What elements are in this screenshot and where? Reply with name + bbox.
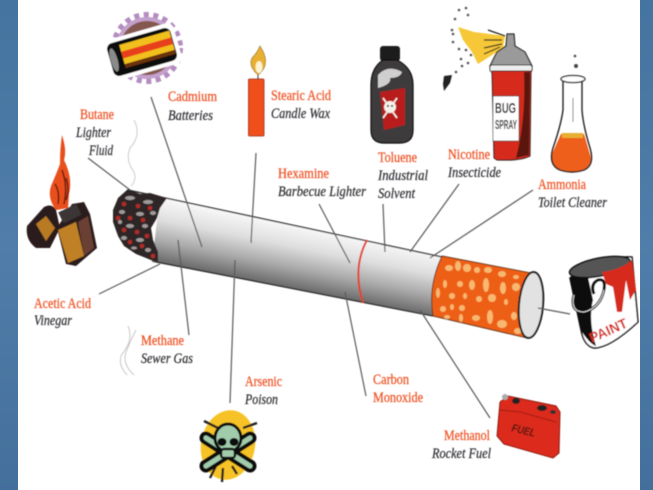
cigarette outline [128,190,442,316]
label: acetic acid: Vinegar [34,313,72,329]
filter [432,256,531,338]
label: hexamine: Hexamine [278,166,329,182]
label: toluene [377,150,428,202]
background left strip [0,0,18,490]
lighter body [57,202,97,266]
label: arsenic [244,374,282,408]
lighter flame [50,135,70,210]
paint handle [573,280,604,312]
filter speckles [436,261,522,334]
label: cadmium: Cadmium [168,89,218,105]
label: butane: Fluid [88,143,114,159]
label: acetic acid [34,296,92,329]
background right strip [640,0,653,490]
label: hexamine: Barbecue Lighter [278,184,366,200]
spray mist [458,27,505,64]
label: butane: Lighter [75,125,111,141]
label: methanol: Rocket Fuel [431,446,491,462]
icon: skull and crossbones [195,406,261,484]
lighter lid [27,206,60,248]
cigarette [113,189,546,339]
skull on bottle [384,101,396,113]
cigarette paper [152,196,442,316]
icon: fuel can [497,394,560,458]
ash embers [116,202,155,258]
label: carbon monoxide: Carbon [373,372,410,388]
icon: bug spray: SPRAY [495,117,517,132]
label: ammonia: Toilet Cleaner [538,195,607,211]
icon: poison bottle [371,46,413,143]
icon: bug spray [443,7,532,160]
label: butane: Butane [80,107,114,123]
label: toluene: Toluene [378,150,417,166]
label: methanol: Methanol [444,428,490,444]
label: nicotine: Nicotine [448,147,490,163]
spray dots [451,7,472,73]
label: ammonia: Ammonia [538,177,586,193]
label: butane [75,107,114,159]
paint drip [602,260,636,312]
paint can label: PAINT [587,315,630,346]
label: carbon monoxide: Monoxide [373,390,423,406]
label: methane [141,333,193,367]
icon: flask [551,55,592,172]
label: toluene: Industrial [377,168,428,184]
ash flecks [118,196,156,252]
can label: BUG [495,100,516,117]
icon: smoke wisp [128,120,137,186]
label: carbon monoxide [373,372,423,406]
label: toluene: Solvent [378,186,416,202]
leader lines [88,97,570,418]
label: methane: Sewer Gas [141,351,193,367]
label: methanol [431,428,491,462]
label: arsenic: Arsenic [245,374,282,390]
label: stearic acid: Candle Wax [271,106,330,122]
label: cadmium: Batteries [168,108,213,124]
ash tip [113,189,167,263]
label: stearic acid: Stearic Acid [271,88,332,104]
icon: methane wisps [120,326,136,375]
label: arsenic: Poison [244,392,278,408]
filter end [516,271,546,339]
fly [443,75,452,91]
can [490,34,532,66]
label: methane: Methane [141,333,184,349]
icon: paint can [568,252,638,348]
label: acetic acid: Acetic Acid [34,296,92,312]
icon: lighter [27,135,97,266]
label: ammonia [538,177,607,211]
label: nicotine: Insecticide [447,165,501,181]
label: stearic acid [271,88,332,122]
label: nicotine [447,147,501,181]
label: cadmium [168,89,218,124]
icon: candle [248,46,266,136]
red band [358,240,367,303]
fuel can label: FUEL [510,422,537,440]
label: hexamine [278,166,366,200]
icon: battery [101,15,183,82]
